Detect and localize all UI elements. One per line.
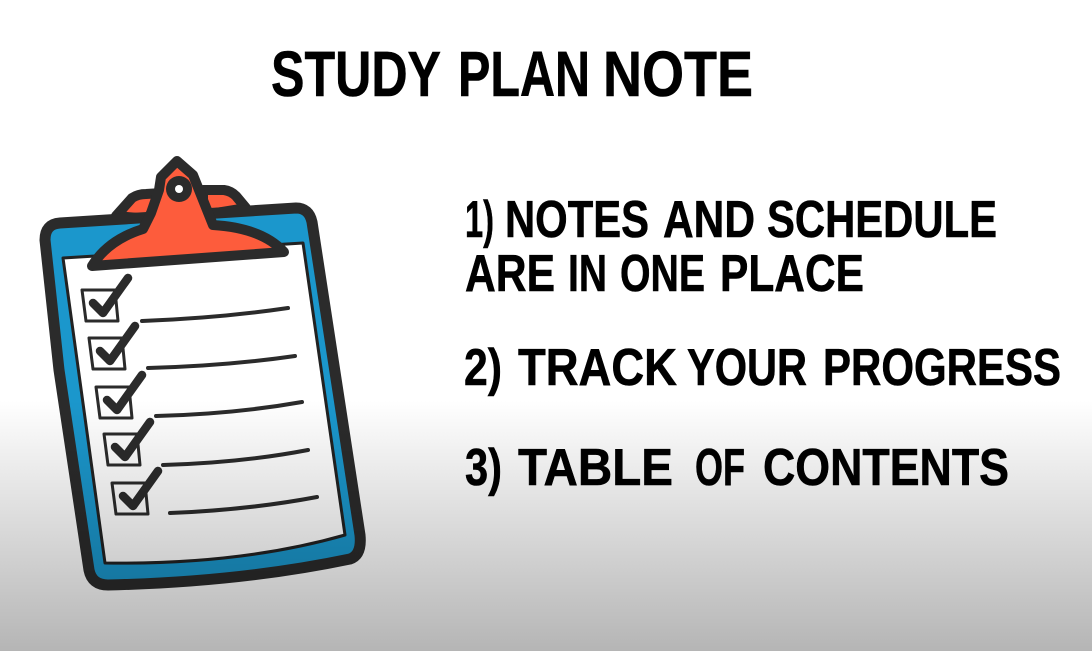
list item 2: YOUR bbox=[687, 339, 807, 397]
clip hole bbox=[166, 176, 192, 202]
icon: clipboard bbox=[45, 161, 360, 585]
checklist item 1 bbox=[82, 278, 288, 321]
list item 1: SCHEDULE bbox=[767, 191, 997, 249]
title: STUDY bbox=[271, 38, 441, 110]
list item 1 bbox=[465, 191, 997, 303]
list item 2: 2) bbox=[464, 339, 502, 397]
list item 3 bbox=[465, 439, 1009, 497]
clipboard board bbox=[45, 208, 360, 585]
title bbox=[271, 38, 753, 110]
clip wings bbox=[116, 190, 246, 220]
checklist item 5 bbox=[112, 471, 317, 514]
checklist item 3 bbox=[96, 375, 302, 418]
list item 2: TRACK bbox=[518, 339, 677, 397]
list item 1: AND bbox=[663, 191, 755, 249]
list item 3: CONTENTS bbox=[763, 439, 1009, 497]
list item 3: OF bbox=[695, 439, 745, 497]
paper sheet bbox=[63, 243, 345, 563]
list item 1: ONE bbox=[620, 245, 705, 303]
title: NOTE bbox=[603, 38, 753, 110]
list item 1: NOTES bbox=[505, 191, 649, 249]
list item 3: TABLE bbox=[518, 439, 673, 497]
title: PLAN bbox=[458, 38, 590, 110]
list item 1: ARE bbox=[465, 245, 555, 303]
list item 2 bbox=[464, 339, 1061, 397]
list item 1: IN bbox=[568, 245, 607, 303]
list item 1: 1) bbox=[465, 191, 494, 249]
list item 1: PLACE bbox=[720, 245, 864, 303]
checklist item 2 bbox=[89, 326, 295, 369]
bottom shading gradient bbox=[0, 400, 1092, 651]
list item 3: 3) bbox=[465, 439, 502, 497]
checklist item 4 bbox=[104, 422, 308, 465]
clip body bbox=[92, 161, 284, 266]
